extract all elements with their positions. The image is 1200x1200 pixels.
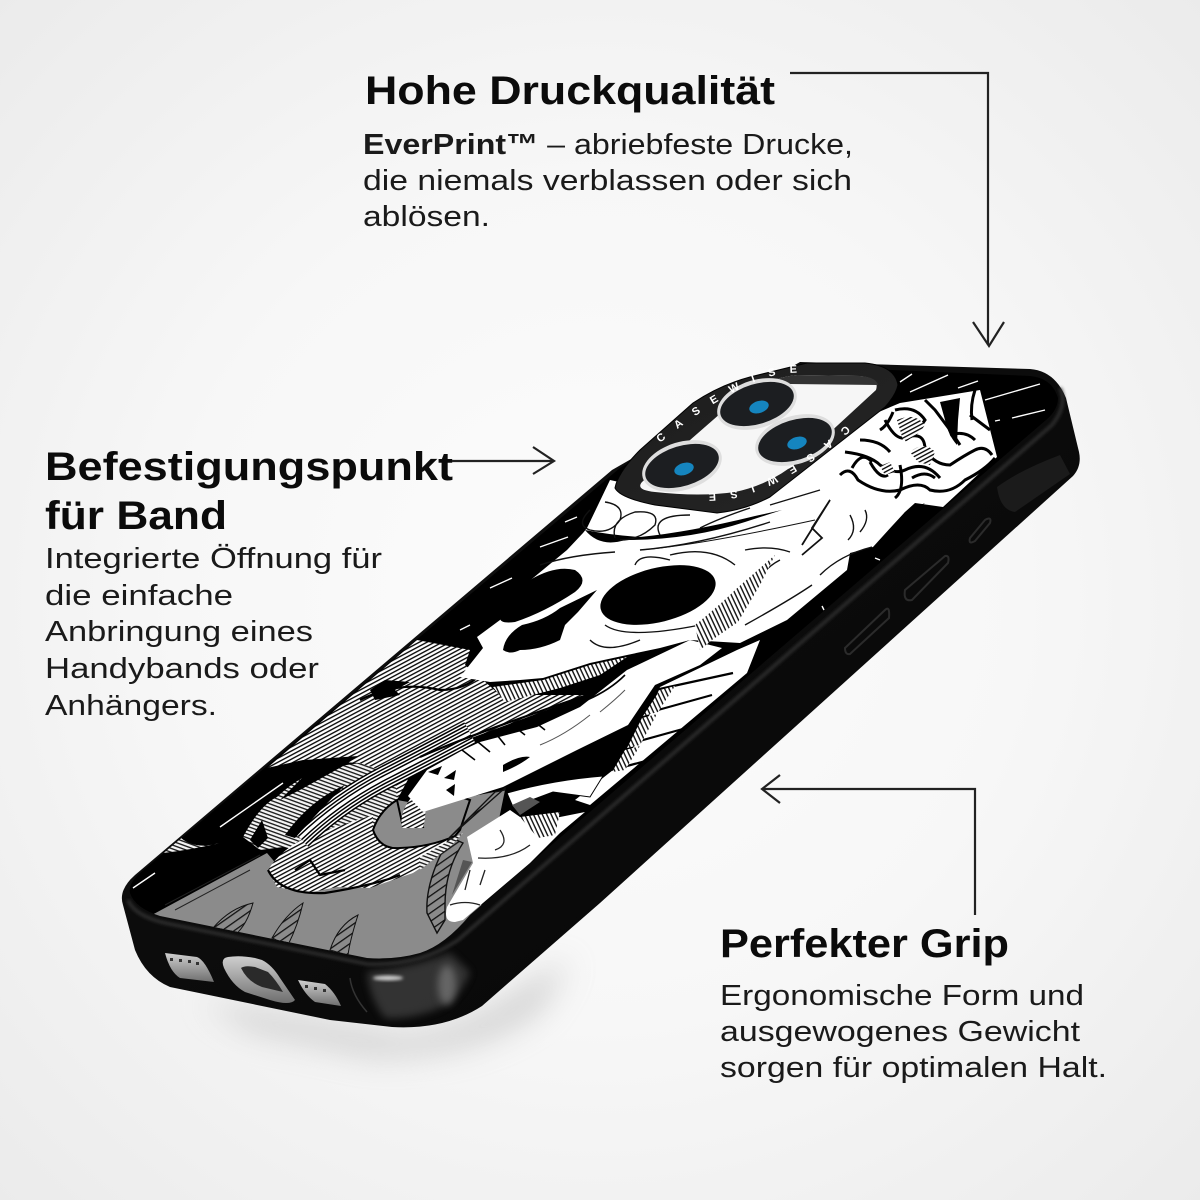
camera plate [640,375,877,494]
lens top [711,369,803,439]
blob hatch [520,812,560,838]
blob contours [450,830,530,905]
speaker left [165,953,214,982]
printed back artwork [130,370,1058,958]
heading: Perfekter Grip [720,922,1009,966]
description: die einfache [45,580,233,612]
rib separators [612,673,733,770]
rim [128,388,1063,964]
torn cranium wedge [904,503,925,513]
curved rib [507,776,603,807]
upper cloud [268,640,584,799]
white lower blob [446,810,585,922]
skull side hatch [695,555,775,650]
usb opening [241,966,283,992]
skull eye right [600,565,716,625]
description [720,980,1107,1084]
lens left [636,431,728,501]
camera module [614,362,898,514]
camera ring [615,363,898,513]
upper mouth hatch [493,657,627,702]
brain outlines [840,390,995,498]
heading: Befestigungspunkt [45,445,453,489]
callout: grip [720,922,1107,1084]
speaker right [298,980,341,1006]
inner shade [745,375,878,392]
description: sorgen für optimalen Halt. [720,1052,1107,1084]
skull detail lines [540,490,872,648]
skull eye left [500,569,582,622]
gray swoop [373,795,470,848]
motion streaks [133,374,1045,910]
callout: strap attachment [45,445,453,722]
hatch band over gray [420,833,463,870]
speaker dots right [305,985,326,992]
snake stripes [427,788,505,933]
phone case [122,362,1080,1027]
lower cloud [268,815,455,893]
phone shadow [200,960,570,1055]
black marks in cloud [250,680,410,848]
description: die niemals verblassen oder sich [363,165,852,197]
black dome crescent [585,510,782,542]
jaw tooth outlines [462,675,625,760]
description: Handybands oder [45,653,319,685]
corner gloss [350,953,470,1018]
lens right [749,405,841,475]
description: ausgewogenes Gewicht [720,1016,1080,1048]
grey fin hatches [213,903,358,955]
small hatched blob [163,838,220,853]
callout: print quality [363,69,853,233]
middle cloud [243,763,397,850]
gray ground [130,790,505,960]
description: Anhängers. [45,690,217,722]
rib cage [575,640,760,805]
arrow: print quality [790,73,1004,346]
bottom ports [165,953,341,1006]
rib hatching [612,686,675,772]
usb port [223,956,295,1003]
swirl contour bundle [300,733,470,838]
heading: für Band [45,494,227,538]
nose cavity [503,590,597,652]
ring branding bottom: CASEWISE [708,426,850,501]
description: EverPrint™ – abriebfeste Drucke, [363,129,853,161]
heading: Hohe Druckqualität [365,69,775,113]
heading [45,445,453,538]
ring branding top: CASEWISE [656,365,797,442]
skull white [460,390,997,682]
case body [122,362,1080,1027]
dark hollow in hand [940,398,960,445]
description: Ergonomische Form und [720,980,1084,1012]
description: ablösen. [363,201,490,233]
jaw bone white [408,640,722,812]
speaker dots [170,958,199,965]
side buttons [845,455,1070,654]
black ground [130,370,1058,914]
description [363,129,853,233]
arrow: strap attachment [452,447,554,474]
swoop drip [401,798,426,828]
arrow: grip [762,775,975,915]
cloud accent lines [268,675,587,893]
description [45,543,382,722]
jaw sockets [428,757,530,796]
brain hatch patches [880,417,935,475]
description: Anbringung eines [45,616,313,648]
description: Integrierte Öffnung für [45,543,382,575]
grey dark patch [452,797,540,895]
ribs white [575,640,760,805]
